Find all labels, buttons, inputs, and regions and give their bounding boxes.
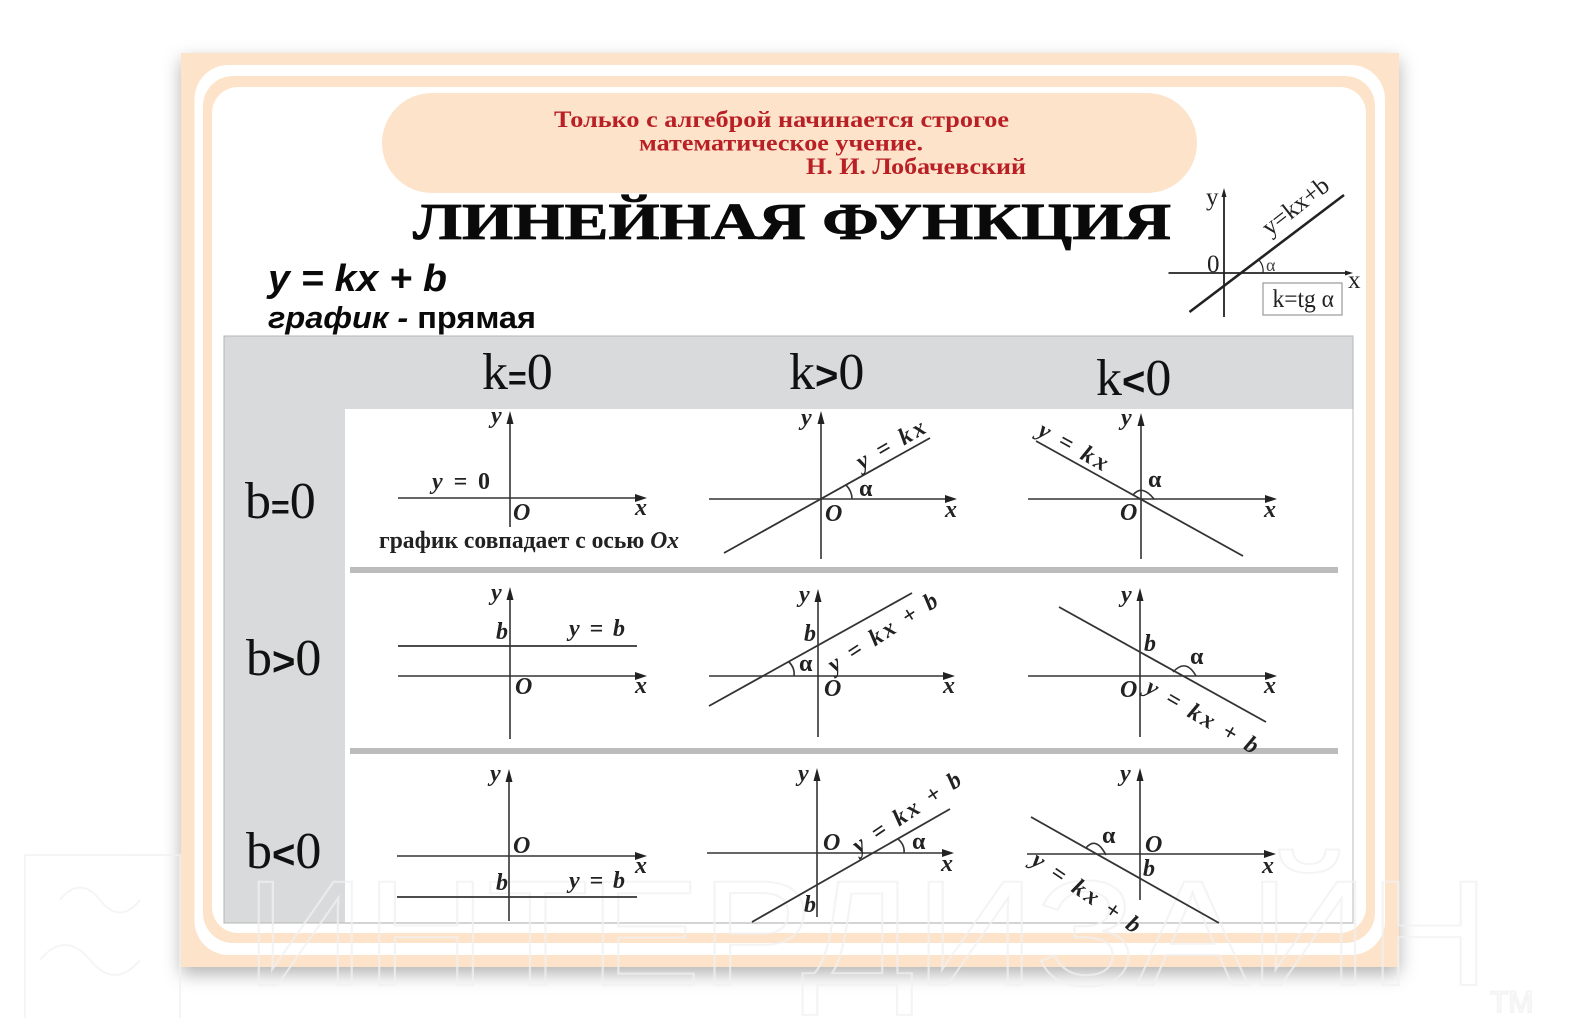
small diagram: slope definition: k=tg α xyxy=(1272,286,1334,313)
chart: k<0, b=0: x xyxy=(1263,497,1276,523)
poster background with border rings xyxy=(181,53,1399,967)
chart: k=0, b<0: O xyxy=(513,833,530,859)
chart: k<0, b>0: α xyxy=(1190,644,1204,670)
watermark: ТМ xyxy=(1490,986,1533,1019)
row header: b<0: b<0 xyxy=(246,823,321,880)
chart: k>0, b<0: x xyxy=(940,851,953,877)
chart: k<0, b=0: y xyxy=(1118,405,1132,431)
chart: k>0, b=0: x xyxy=(944,497,957,523)
column header: k<0: k<0 xyxy=(1096,350,1171,407)
chart: k=0, b=0: y = 0 xyxy=(429,469,490,495)
chart: k<0, b>0: y = kx + b xyxy=(1138,673,1263,760)
chart: k=0, b=0: x xyxy=(634,495,647,521)
chart: k>0, b<0: b xyxy=(804,892,816,918)
chart: k<0, b>0: y xyxy=(1118,582,1132,608)
title: ЛИНЕЙНАЯ ФУНКЦИЯ xyxy=(413,194,1171,251)
chart: k=0, b>0: b xyxy=(496,619,508,645)
chart: k<0, b=0: O xyxy=(1120,500,1137,526)
chart: k>0, b=0 xyxy=(709,405,957,559)
chart: k<0, b<0: O xyxy=(1145,832,1162,858)
small diagram: slope definition: 0 xyxy=(1207,251,1220,278)
chart: k>0, b<0: O xyxy=(823,830,840,856)
chart: k=0, b>0: y = b xyxy=(566,616,625,642)
chart: k>0, b=0: y xyxy=(798,405,812,431)
chart: k=0, b=0: y xyxy=(488,403,502,429)
chart: k=0, b<0: x xyxy=(634,853,647,879)
chart: k=0, b>0: O xyxy=(515,674,532,700)
small diagram: slope definition: y=kx+b xyxy=(1257,172,1335,241)
chart: k<0, b<0 xyxy=(1024,761,1276,939)
chart: k<0, b>0: O xyxy=(1120,677,1137,703)
chart: k<0, b>0 xyxy=(1028,582,1277,760)
chart: k>0, b>0: b xyxy=(804,621,816,647)
chart: k>0, b>0: x xyxy=(942,673,955,699)
formula: y = kx + b xyxy=(266,258,447,300)
quote pill: математическое учение. xyxy=(639,130,923,156)
chart: k>0, b<0: α xyxy=(912,829,926,855)
row header: b=0: b=0 xyxy=(245,473,316,530)
column header: k=0: k=0 xyxy=(482,344,553,401)
small diagram: slope definition: y xyxy=(1206,184,1219,211)
chart: k>0, b>0: O xyxy=(824,676,841,702)
chart: k>0, b>0: y = kx + b xyxy=(821,588,943,680)
chart: k>0, b>0: α xyxy=(799,651,813,677)
chart: k<0, b<0: b xyxy=(1143,856,1155,882)
chart: k<0, b=0: y = kx xyxy=(1031,416,1113,477)
chart: k=0, b<0: y xyxy=(487,761,501,787)
chart: k=0, b>0: x xyxy=(634,673,647,699)
small diagram: slope definition xyxy=(1168,172,1361,317)
chart: k>0, b<0: y = kx + b xyxy=(845,767,966,861)
chart: k>0, b>0: y xyxy=(796,582,810,608)
chart: k>0, b<0: y xyxy=(795,761,809,787)
row header: b>0: b>0 xyxy=(246,630,321,687)
chart: k>0, b=0: O xyxy=(825,501,842,527)
chart: k<0, b<0: x xyxy=(1261,853,1274,879)
chart: k=0, b<0 xyxy=(397,761,647,921)
chart: k=0, b=0: график совпадает с осью Ox xyxy=(379,528,679,554)
chart: k=0, b<0: b xyxy=(496,870,508,896)
chart: k<0, b<0: y xyxy=(1117,761,1131,787)
chart: k=0, b<0: y = b xyxy=(566,868,625,894)
chart: k=0, b>0: y xyxy=(488,580,502,606)
chart: k<0, b=0 xyxy=(1028,405,1277,559)
chart: k<0, b=0: α xyxy=(1148,467,1162,493)
chart: k>0, b=0: α xyxy=(859,476,873,502)
chart: k<0, b>0: b xyxy=(1144,631,1156,657)
quote pill: Только с алгеброй начинается строгое xyxy=(554,107,1009,132)
watermark: ИНТЕРДИЗАЙН xyxy=(245,849,1490,1017)
chart: k<0, b<0: α xyxy=(1102,823,1116,849)
chart: k<0, b>0: x xyxy=(1263,673,1276,699)
quote pill: Н. И. Лобачевский xyxy=(806,154,1026,179)
chart: k=0, b=0: O xyxy=(513,500,530,526)
small diagram: slope definition: x xyxy=(1348,267,1361,294)
quote pill xyxy=(382,93,1197,193)
table panel xyxy=(224,336,1353,923)
chart: k=0, b>0 xyxy=(398,580,647,739)
chart: k>0, b=0: y = kx xyxy=(849,415,930,477)
chart: k<0, b<0: y = kx + b xyxy=(1024,845,1145,939)
subtitle: график - прямая xyxy=(268,300,536,335)
chart: k=0, b=0 xyxy=(379,403,679,554)
column header: k>0: k>0 xyxy=(789,344,864,401)
small diagram: slope definition: α xyxy=(1266,255,1276,275)
chart: k>0, b>0 xyxy=(709,582,955,737)
chart: k>0, b<0 xyxy=(707,761,966,922)
